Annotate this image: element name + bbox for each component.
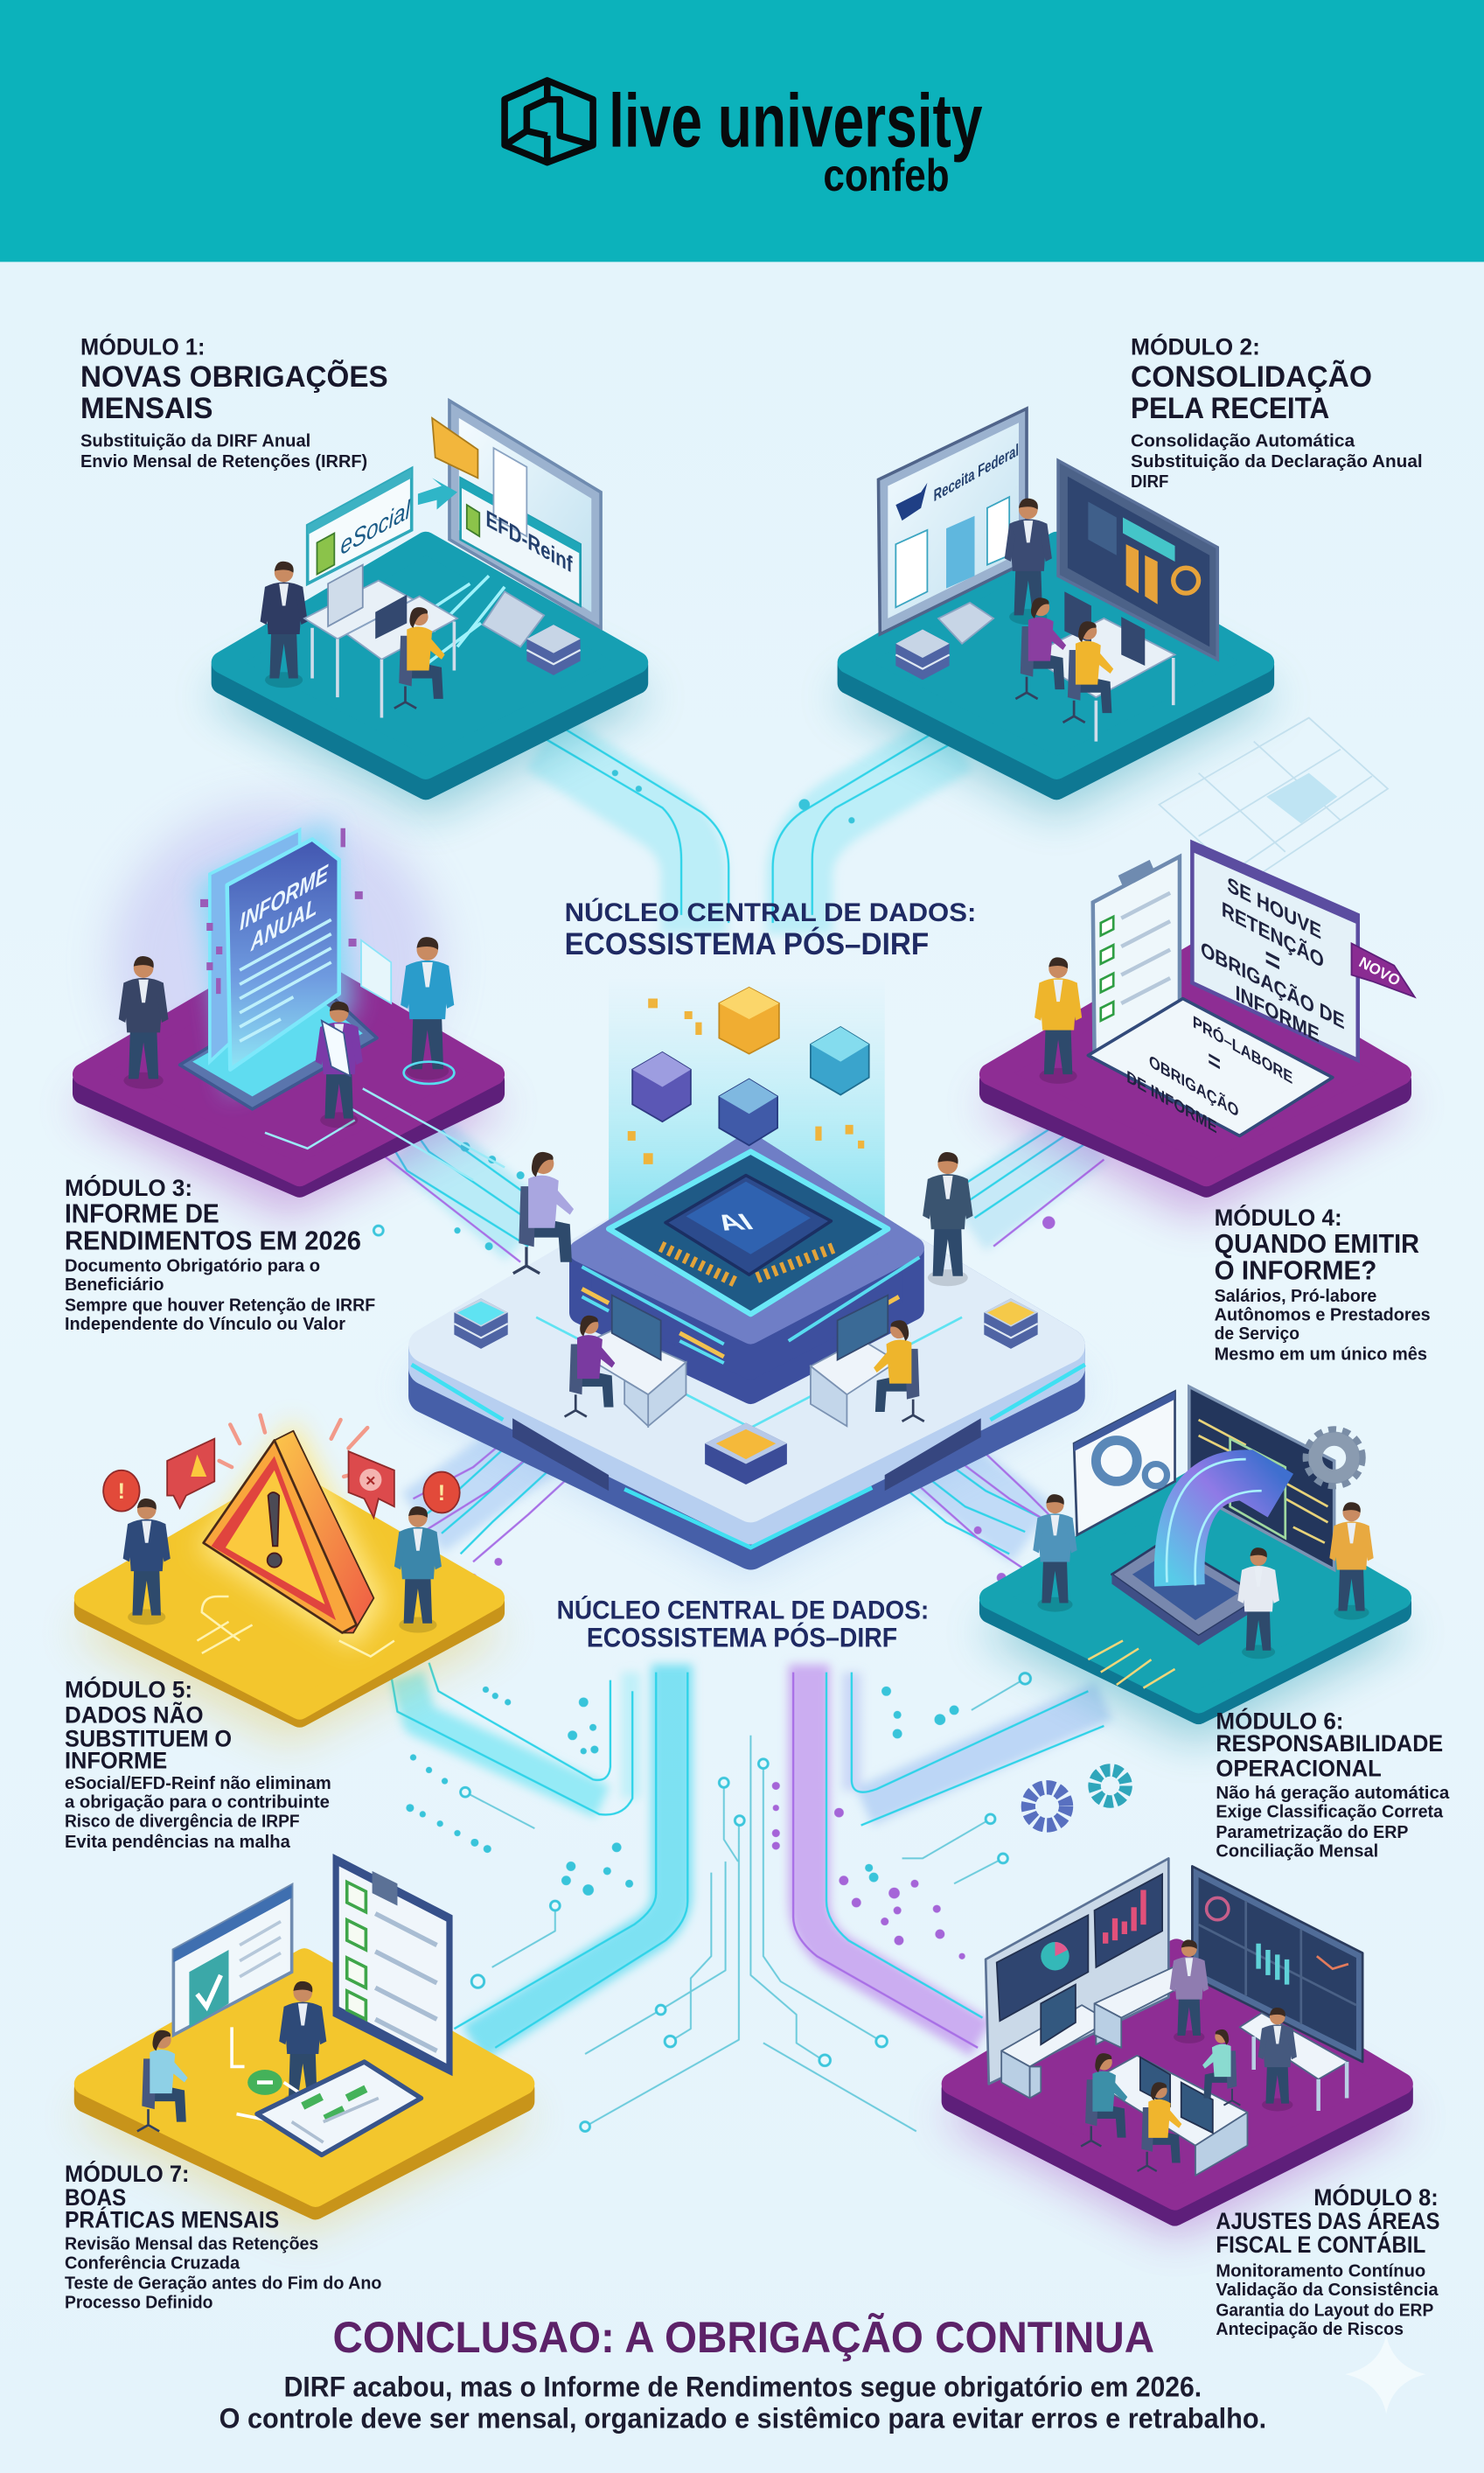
cube: teal xyxy=(811,1027,869,1095)
warning triangle xyxy=(197,1420,387,1649)
panel: module 7 platform scene xyxy=(73,1854,536,2232)
text block: module 8: AJUSTES DAS ÁREAS xyxy=(1216,2207,1440,2234)
rule panel: = xyxy=(1265,940,1280,982)
panel: central data core xyxy=(407,978,1087,1569)
text block: module 6: Conciliação Mensal xyxy=(1216,1841,1378,1862)
text block: module 6: Não há geração automática xyxy=(1216,1783,1450,1803)
ports xyxy=(512,1418,981,1491)
data streams xyxy=(373,729,1123,2131)
browser panel xyxy=(173,1885,292,2035)
person: seated analyst xyxy=(394,607,445,709)
glowing document: ANUAL xyxy=(250,893,317,957)
data arc device xyxy=(1111,1459,1280,1645)
text block: module 8: Antecipação de Riscos xyxy=(1216,2319,1404,2339)
text block: module 4: de Serviço xyxy=(1215,1324,1299,1344)
text block: module 3: Beneficiário xyxy=(65,1275,164,1295)
circuit traces xyxy=(465,1679,1025,2131)
desk: lower right xyxy=(811,1296,897,1426)
person: seated left xyxy=(1081,2053,1127,2147)
heading: central core lower xyxy=(557,1595,929,1653)
icon: check badge xyxy=(247,2070,282,2095)
ribbon: novo: NOVO xyxy=(1356,954,1404,989)
halo xyxy=(404,1062,454,1084)
rule card: DE INFORME xyxy=(1126,1067,1217,1138)
floating page xyxy=(361,940,391,1003)
cube: blue xyxy=(719,1079,777,1145)
person: standing with tablet xyxy=(1170,1939,1209,2043)
text block: module 2: MÓDULO 2: xyxy=(1131,333,1260,360)
page held by reader xyxy=(322,1021,350,1076)
rule panel: INFORME xyxy=(1236,981,1320,1047)
conclusion xyxy=(219,2312,1266,2434)
heading: central core: ECOSSISTEMA PÓS–DIRF xyxy=(565,926,929,961)
person: presenter xyxy=(1005,499,1052,625)
text block: module 1: MÓDULO 1: xyxy=(80,333,205,360)
text block: module 3 xyxy=(65,1174,375,1334)
text block: module 1: MENSAIS xyxy=(80,392,212,425)
person: analyst with tablet xyxy=(119,956,169,1089)
AI chip xyxy=(661,1176,838,1282)
panel: module 6 platform scene xyxy=(978,1387,1413,1743)
logo wordmark xyxy=(609,80,983,201)
base LED lines xyxy=(412,1365,1085,1547)
text block: module 4: Salários, Pró-labore xyxy=(1215,1286,1376,1306)
folder icon xyxy=(432,418,477,478)
text block: module 7: Conferência Cruzada xyxy=(65,2253,240,2273)
text block: module 7: PRÁTICAS MENSAIS xyxy=(65,2205,279,2232)
alert bubbles: ! xyxy=(118,1479,125,1504)
config panel xyxy=(1074,1392,1175,1535)
text block: module 8: Validação da Consistência xyxy=(1216,2280,1439,2300)
person: left analyst xyxy=(123,1498,171,1624)
rule panel: SE HOUVE xyxy=(1227,872,1321,944)
rule panel: RETENÇÃO xyxy=(1222,896,1324,973)
text block: module 5: a obrigação para o contribuinte xyxy=(65,1792,330,1813)
alert bubbles: × xyxy=(366,1471,376,1491)
text block: module 8: Monitoramento Contínuo xyxy=(1216,2260,1425,2281)
conclusion: CONCLUSAO: A OBRIGAÇÃO CONTINUA xyxy=(333,2312,1154,2362)
conclusion: O controle deve ser mensal, organizado e sistêmico para evitar erros e retrabalho. xyxy=(219,2402,1266,2434)
text block: module 5: SUBSTITUEM O xyxy=(65,1725,232,1751)
person: reader xyxy=(316,1002,363,1128)
data dots xyxy=(406,770,958,1896)
text block: module 7: Processo Definido xyxy=(65,2292,212,2312)
desk and computer xyxy=(304,565,457,718)
traces xyxy=(1088,1641,1175,1688)
text block: module 2 xyxy=(1131,333,1423,492)
small data tokens xyxy=(628,999,864,1164)
alert sparks xyxy=(219,1415,367,1477)
panel: module 4 platform scene xyxy=(978,842,1415,1218)
text block: module 8: MÓDULO 8: xyxy=(1313,2183,1439,2211)
text block: module 4: Mesmo em um único mês xyxy=(1215,1345,1427,1365)
heading: central core lower: NÚCLEO CENTRAL DE DADOS: xyxy=(557,1595,929,1624)
person: standing analyst xyxy=(261,562,308,688)
heading: central core lower: ECOSSISTEMA PÓS–DIRF xyxy=(587,1622,897,1653)
eSocial panel xyxy=(308,469,457,583)
alert bubbles xyxy=(103,1439,460,1518)
icon: sparkle watermark xyxy=(1345,2335,1425,2414)
text block: module 4: MÓDULO 4: xyxy=(1215,1204,1342,1231)
server stack xyxy=(895,630,950,680)
person: man yellow xyxy=(1329,1502,1374,1620)
ribbon: novo xyxy=(1352,943,1415,997)
light traces xyxy=(410,576,505,670)
inner ring xyxy=(536,1317,962,1428)
server stack xyxy=(526,625,581,675)
large clipboard xyxy=(333,1854,453,2076)
text block: module 3: MÓDULO 3: xyxy=(65,1174,192,1201)
logo wordmark: confeb xyxy=(823,150,950,201)
glowing document xyxy=(180,821,377,1109)
text block: module 2: PELA RECEITA xyxy=(1131,392,1329,425)
text block: module 3: Sempre que houver Retenção de IRRF xyxy=(65,1296,375,1316)
rule card xyxy=(1088,999,1333,1138)
person: standing at screen xyxy=(1258,2008,1297,2111)
panel: module 5 platform scene xyxy=(71,1415,506,1743)
text block: module 7: Teste de Geração antes do Fim do Ano xyxy=(65,2274,381,2294)
text block: module 7: Revisão Mensal das Retenções xyxy=(65,2234,318,2254)
desk team xyxy=(1015,591,1175,742)
wall screens left xyxy=(986,1858,1168,2084)
conclusion: DIRF acabou, mas o Informe de Rendimentos segue obrigatório em 2026. xyxy=(284,2371,1202,2402)
person: seated right xyxy=(1202,2029,1240,2106)
platform mini server: left xyxy=(454,1298,508,1349)
icon: gears xyxy=(1028,1770,1126,1826)
text block: module 2: CONSOLIDAÇÃO xyxy=(1131,360,1372,394)
desk: lower left xyxy=(573,1296,686,1426)
text block: module 5: Evita pendências na malha xyxy=(65,1832,290,1852)
person: standing xyxy=(279,1981,326,2107)
rule panel xyxy=(1192,842,1358,1060)
platform mini server: right xyxy=(984,1298,1038,1349)
person: lower left xyxy=(565,1316,615,1416)
text block: module 7 xyxy=(65,2160,381,2312)
icon: logo cube xyxy=(505,80,593,163)
alert bubbles: ! xyxy=(438,1481,445,1505)
panel: module 8 platform scene xyxy=(940,1858,1415,2237)
platform mini server: front xyxy=(705,1423,787,1484)
text block: module 5 xyxy=(65,1675,331,1852)
text block: module 4: QUANDO EMITIR xyxy=(1215,1229,1419,1259)
rule panel: OBRIGAÇÃO DE xyxy=(1201,936,1345,1034)
text block: module 3: Documento Obrigatório para o xyxy=(65,1256,320,1276)
person: hologram xyxy=(401,937,454,1079)
wall screens right xyxy=(1192,1866,1362,2062)
text block: module 1: Substituição da DIRF Anual xyxy=(80,430,310,451)
server tower xyxy=(581,1143,919,1393)
text block: module 4: O INFORME? xyxy=(1215,1256,1376,1286)
text block: module 6 xyxy=(1216,1708,1450,1862)
text block: module 1: NOVAS OBRIGAÇÕES xyxy=(80,359,388,394)
glowing traces xyxy=(197,1596,394,1657)
person: man front xyxy=(1237,1547,1279,1659)
floating bits xyxy=(200,828,363,994)
rule card: = xyxy=(1208,1044,1221,1079)
AI chip: AI xyxy=(710,1210,759,1236)
monitor xyxy=(449,401,601,646)
text block: module 6: Exige Classificação Correta xyxy=(1216,1802,1444,1822)
text block: module 7: BOAS xyxy=(65,2184,126,2211)
heading: central core: NÚCLEO CENTRAL DE DADOS: xyxy=(565,898,976,927)
text block: module 6: RESPONSABILIDADE xyxy=(1216,1730,1443,1757)
text block: module 8 xyxy=(1216,2183,1440,2339)
desks xyxy=(1001,1966,1348,2176)
text block: module 2: Substituição da Declaração Anual xyxy=(1131,451,1423,472)
cube: purple xyxy=(632,1052,691,1121)
person: woman pointing xyxy=(1033,1494,1077,1612)
dashboard screen xyxy=(1058,461,1217,660)
text block: module 5: MÓDULO 5: xyxy=(65,1675,192,1702)
text block: module 2: Consolidação Automática xyxy=(1131,430,1355,451)
person: seated middle xyxy=(1138,2082,1181,2171)
small clipboard xyxy=(257,2062,422,2155)
logo wordmark: live university xyxy=(609,80,983,164)
monitor: EFD-Reinf xyxy=(485,505,573,578)
faint grid decoration xyxy=(1159,718,1388,884)
eSocial panel: eSocial xyxy=(341,494,411,561)
panel: module 1 platform scene xyxy=(206,401,653,815)
icon: gear xyxy=(1306,1429,1362,1486)
stream bright lines xyxy=(379,729,1123,2048)
panel: module 3 platform scene xyxy=(71,805,506,1218)
text block: module 3: INFORME DE xyxy=(65,1199,219,1229)
rule card: PRÓ–LABORE xyxy=(1193,1012,1292,1088)
checklist clipboard xyxy=(1093,856,1180,1057)
flow arrows xyxy=(232,2027,344,2122)
cube: yellow xyxy=(719,988,779,1054)
text block: module 8: Garantia do Layout do ERP xyxy=(1216,2300,1433,2320)
Receita Federal monitor xyxy=(878,409,1027,644)
text block: module 1 xyxy=(80,333,388,472)
person: seated top-left xyxy=(513,1152,574,1274)
circuit traces xyxy=(265,1088,505,1180)
text block: module 4 xyxy=(1215,1204,1431,1365)
floating data cubes xyxy=(628,988,869,1164)
monitors xyxy=(1041,1985,1213,2133)
person: analyst yellow xyxy=(1035,957,1082,1084)
text block: module 5: Risco de divergência de IRPF xyxy=(65,1811,300,1831)
glowing document: INFORME xyxy=(240,860,329,936)
text block: module 6: MÓDULO 6: xyxy=(1216,1708,1343,1735)
stream glows xyxy=(407,742,1104,2043)
text block: module 4: Autônomos e Prestadores xyxy=(1215,1304,1431,1324)
text block: module 2: DIRF xyxy=(1131,472,1168,492)
text block: module 8: FISCAL E CONTÁBIL xyxy=(1216,2231,1425,2258)
core base platform xyxy=(426,1156,1068,1553)
Receita Federal monitor: Receita Federal xyxy=(934,441,1019,506)
person: seated xyxy=(137,2030,188,2131)
text block: module 5: INFORME xyxy=(65,1748,167,1774)
text block: module 5: DADOS NÃO xyxy=(65,1701,204,1728)
panel: module 2 platform scene xyxy=(833,409,1279,815)
circuit nodes xyxy=(373,1226,1031,2131)
code screen xyxy=(1189,1387,1334,1569)
light beam xyxy=(609,978,885,1247)
text block: module 1: Envio Mensal de Retenções (IRRF) xyxy=(80,451,367,472)
text block: module 5: eSocial/EFD-Reinf não eliminam xyxy=(65,1773,331,1793)
heading: central core xyxy=(565,898,976,961)
text block: module 7: MÓDULO 7: xyxy=(65,2160,189,2187)
faint square xyxy=(1266,773,1337,823)
person: lower right xyxy=(874,1320,924,1422)
text block: module 6: Parametrização do ERP xyxy=(1216,1822,1409,1842)
person: right analyst xyxy=(394,1506,442,1633)
person: standing top-right xyxy=(923,1152,973,1286)
text block: module 3: Independente do Vínculo ou Valor xyxy=(65,1314,345,1334)
rule card: OBRIGAÇÃO xyxy=(1149,1051,1238,1121)
text block: module 3: RENDIMENTOS EM 2026 xyxy=(65,1226,361,1255)
text block: module 6: OPERACIONAL xyxy=(1216,1756,1382,1782)
purple data dots xyxy=(470,1216,1055,1960)
header band xyxy=(0,0,1484,262)
